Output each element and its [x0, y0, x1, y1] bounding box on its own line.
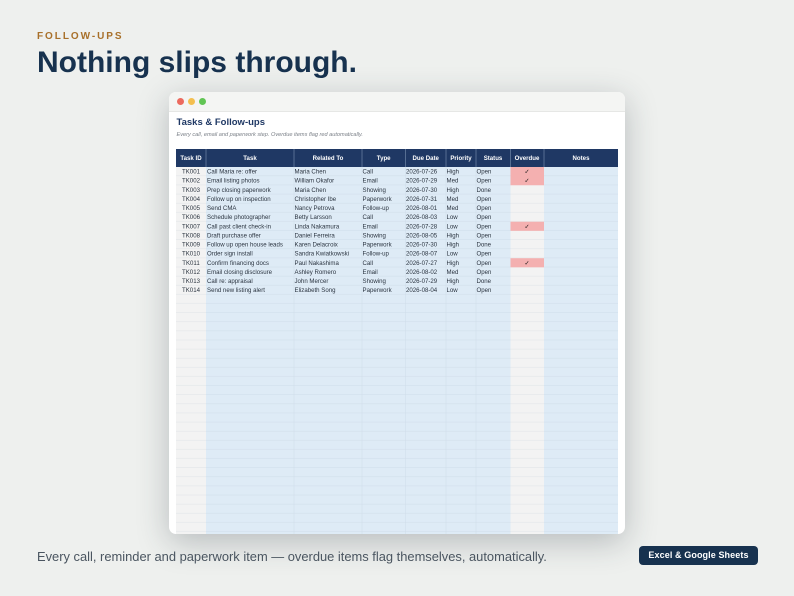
table header row: Task ID: [180, 155, 202, 162]
row TK014: TK014: [182, 287, 201, 294]
row TK011: Call: [362, 260, 373, 267]
row TK005: Nancy Petrova: [294, 205, 335, 212]
row TK012: [182, 269, 491, 276]
row TK010: Sandra Kwiatkowski: [294, 251, 349, 258]
row TK001: Maria Chen: [294, 169, 326, 176]
eyebrow label: FOLLOW-UPS: [37, 31, 124, 42]
badge: Excel & Google Sheets: Excel & Google Sheets: [648, 550, 749, 560]
table header row: Due Date: [412, 155, 440, 162]
table header row: Priority: [450, 155, 472, 162]
row TK012: 2026-08-02: [406, 269, 438, 276]
row TK004: Christopher Ibe: [294, 196, 337, 203]
row TK007: Linda Nakamura: [294, 223, 340, 230]
row TK002: Med: [446, 178, 458, 185]
row TK005: Send CMA: [207, 205, 237, 212]
row TK011: Open: [476, 260, 491, 267]
row TK009: TK009: [182, 242, 201, 249]
row TK004: Paperwork: [362, 196, 393, 203]
icon: red window dot: [177, 98, 184, 105]
row TK011: ✓: [524, 260, 530, 267]
row TK001: Call Maria re: offer: [207, 169, 257, 176]
row TK010: [182, 251, 491, 258]
row TK002: Email: [362, 178, 378, 185]
row TK010: Low: [446, 251, 458, 258]
row TK004: Open: [476, 196, 491, 203]
row TK002: TK002: [182, 178, 201, 185]
row TK009: Follow up open house leads: [207, 242, 283, 249]
row TK012: TK012: [182, 269, 201, 276]
row TK007: Low: [446, 223, 458, 230]
row TK013: Call re: appraisal: [207, 278, 253, 285]
row TK007: Email: [362, 223, 378, 230]
row TK006: 2026-08-03: [406, 214, 438, 221]
row TK009: High: [446, 242, 459, 249]
row TK014: Elizabeth Song: [294, 287, 336, 294]
row TK013: High: [446, 278, 459, 285]
row TK001: TK001: [182, 169, 201, 176]
row TK001: Call: [362, 169, 373, 176]
row TK006: TK006: [182, 214, 201, 221]
row TK002: Email listing photos: [207, 178, 260, 185]
row TK006: Low: [446, 214, 458, 221]
panel: spreadsheet window: [169, 92, 625, 534]
row TK014: 2026-08-04: [406, 287, 438, 294]
table header row: Notes: [573, 155, 590, 162]
row TK006: Open: [476, 214, 491, 221]
row TK003: Showing: [362, 187, 386, 194]
row TK013: TK013: [182, 278, 201, 285]
row TK007: Call past client check-in: [207, 223, 271, 230]
row TK010: 2026-08-07: [406, 251, 438, 258]
row TK004: Follow up on inspection: [207, 196, 271, 203]
row TK001: [182, 169, 530, 176]
row TK006: Schedule photographer: [207, 214, 270, 221]
row TK009: 2026-07-30: [406, 242, 438, 249]
row TK008: Daniel Ferreira: [294, 232, 335, 239]
table header row: [176, 149, 618, 167]
row TK007: 2026-07-28: [406, 223, 438, 230]
row TK011: Confirm financing docs: [207, 260, 269, 267]
row TK006: Betty Larsson: [294, 214, 332, 221]
row TK011: TK011: [182, 260, 200, 267]
row TK013: 2026-07-29: [406, 278, 438, 285]
row TK006: [182, 214, 491, 221]
row TK014: Send new listing alert: [207, 287, 265, 294]
row TK003: [182, 187, 492, 194]
title: Nothing slips through.: [37, 46, 357, 79]
sheet subtitle: Every call, email and paperwork step. Overdue items flag red automatically.: [176, 132, 363, 138]
row TK003: Done: [476, 187, 492, 194]
row TK011: 2026-07-27: [406, 260, 438, 267]
row TK008: High: [446, 232, 459, 239]
row TK011: Paul Nakashima: [294, 260, 339, 267]
row TK010: Follow-up: [362, 251, 390, 258]
row TK013: Done: [476, 278, 492, 285]
row TK008: Showing: [362, 232, 386, 239]
table header row: Related To: [313, 155, 344, 162]
overdue red flags: [510, 167, 544, 267]
row TK008: 2026-08-05: [406, 232, 438, 239]
window title bar: [169, 92, 625, 112]
table header row: Status: [484, 155, 503, 162]
row TK009: [182, 242, 492, 249]
row TK012: Email closing disclosure: [207, 269, 273, 276]
row TK004: TK004: [182, 196, 201, 203]
row TK003: High: [446, 187, 459, 194]
table rows: [182, 169, 530, 294]
row TK007: [182, 223, 530, 230]
row TK005: Follow-up: [362, 205, 390, 212]
row TK011: High: [446, 260, 459, 267]
row TK005: Open: [476, 205, 491, 212]
row TK007: ✓: [524, 223, 530, 230]
table header row: Task: [243, 155, 257, 162]
table header row: Overdue: [515, 155, 540, 162]
row TK008: TK008: [182, 232, 201, 239]
row TK012: Med: [446, 269, 458, 276]
row TK011: [182, 260, 530, 267]
row TK009: Paperwork: [362, 242, 393, 249]
row TK014: [182, 287, 491, 294]
task table: [176, 149, 618, 534]
icon: green window dot: [199, 98, 206, 105]
row TK001: Open: [476, 169, 491, 176]
row TK005: Med: [446, 205, 458, 212]
sheet heading: Tasks & Follow-ups: [176, 117, 265, 128]
row TK007: TK007: [182, 223, 201, 230]
row TK014: Open: [476, 287, 491, 294]
row TK004: [182, 196, 491, 203]
row TK006: Call: [362, 214, 373, 221]
row TK010: Open: [476, 251, 491, 258]
row TK002: Open: [476, 178, 491, 185]
row TK002: William Okafor: [294, 178, 334, 185]
row TK004: Med: [446, 196, 458, 203]
row TK008: [182, 232, 491, 239]
row TK003: Maria Chen: [294, 187, 326, 194]
row TK002: ✓: [524, 178, 530, 185]
footer caption: Every call, reminder and paperwork item — overdue items flag themselves, automatically.: [37, 549, 547, 564]
row TK010: Order sign install: [207, 251, 253, 258]
badge: Excel & Google Sheets: [639, 546, 758, 565]
table header row: Type: [377, 155, 391, 162]
row TK008: Draft purchase offer: [207, 232, 261, 239]
row TK008: Open: [476, 232, 491, 239]
row TK014: Low: [446, 287, 458, 294]
row TK004: 2026-07-31: [406, 196, 438, 203]
row TK013: John Mercer: [294, 278, 328, 285]
row TK009: Karen Delacroix: [294, 242, 338, 249]
row TK013: Showing: [362, 278, 386, 285]
row TK005: 2026-08-01: [406, 205, 438, 212]
row TK001: ✓: [524, 169, 530, 176]
row TK003: TK003: [182, 187, 201, 194]
row TK003: Prep closing paperwork: [207, 187, 272, 194]
row TK001: 2026-07-26: [406, 169, 438, 176]
row TK010: TK010: [182, 251, 201, 258]
row TK001: High: [446, 169, 459, 176]
row TK009: Done: [476, 242, 492, 249]
row TK012: Open: [476, 269, 491, 276]
row TK005: [182, 205, 491, 212]
row TK012: Ashley Romero: [294, 269, 337, 276]
row TK005: TK005: [182, 205, 201, 212]
row TK012: Email: [362, 269, 378, 276]
row TK014: Paperwork: [362, 287, 393, 294]
row TK007: Open: [476, 223, 491, 230]
row TK013: [182, 278, 492, 285]
row TK002: [182, 178, 530, 185]
row TK003: 2026-07-30: [406, 187, 438, 194]
table body background: [176, 167, 618, 534]
icon: yellow window dot: [188, 98, 195, 105]
row TK002: 2026-07-29: [406, 178, 438, 185]
